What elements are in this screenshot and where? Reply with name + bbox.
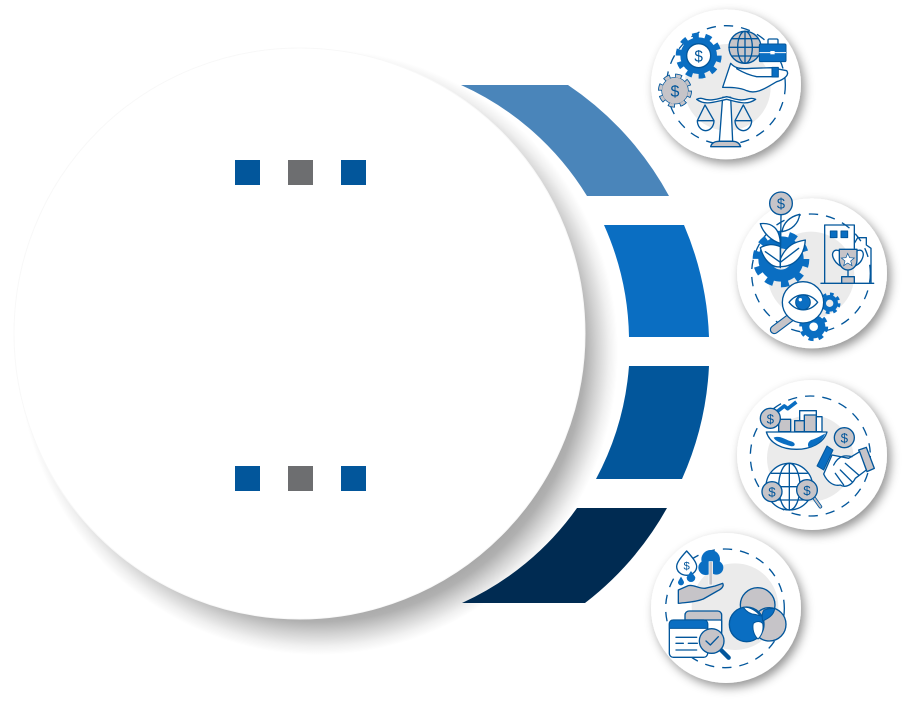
icon: water drop with dollar: $	[684, 560, 691, 572]
icon: dollar coin right	[834, 428, 854, 448]
icon: cargo on half globe	[766, 411, 827, 449]
segment 2: bright blue	[604, 225, 709, 337]
icon: briefcase	[759, 39, 786, 62]
icon: globe with coins and magnifier	[762, 463, 820, 510]
top square divider	[235, 160, 366, 185]
icon: growth arrow	[777, 402, 796, 412]
icon: venn diagram	[729, 588, 786, 642]
icon: dollar coin top left	[760, 408, 780, 428]
bottom square divider	[235, 466, 366, 491]
icon badge 1: finance, globe, justice	[651, 9, 801, 159]
icon: balance scale	[697, 97, 756, 147]
icon: building with trophy	[821, 225, 874, 283]
icon: gears behind magnifier	[801, 294, 839, 339]
icon: dollar coin top left: $	[767, 411, 775, 426]
icon: small gear with dollar: $	[671, 84, 680, 101]
segment 3: mid blue	[596, 366, 709, 479]
icon: globe with coins and magnifier: $	[768, 485, 776, 500]
icon: hand	[678, 583, 723, 603]
icon: magnifier with eye	[774, 282, 824, 330]
icon: dollar coin right: $	[841, 431, 849, 446]
icon: large gear with dollar: $	[694, 48, 703, 65]
icon: browser windows with magnifier	[669, 611, 729, 658]
icon: water drop with dollar	[677, 551, 697, 585]
icon badge 3: trade, partnership, global	[737, 380, 887, 530]
icon: globe	[729, 31, 761, 63]
icon: handshake	[817, 446, 874, 486]
segment 4: navy	[462, 508, 667, 603]
icon: gear with plant and coin	[756, 192, 806, 284]
main white circle	[14, 48, 585, 619]
icon: open hand	[723, 63, 788, 92]
segment 1: light blue	[461, 85, 669, 196]
icon: tree	[698, 550, 723, 585]
icon badge 4: environment, overlap, review	[651, 533, 801, 683]
icon: gear with plant and coin: $	[777, 197, 785, 213]
icon: large gear with dollar	[679, 36, 719, 76]
ring segments	[461, 85, 709, 603]
main circle shadow	[18, 49, 618, 655]
icon: globe with coins and magnifier: $	[803, 483, 811, 498]
icon: small gear with dollar	[660, 76, 690, 105]
icon badge 2: growth, award, vision	[737, 192, 887, 348]
